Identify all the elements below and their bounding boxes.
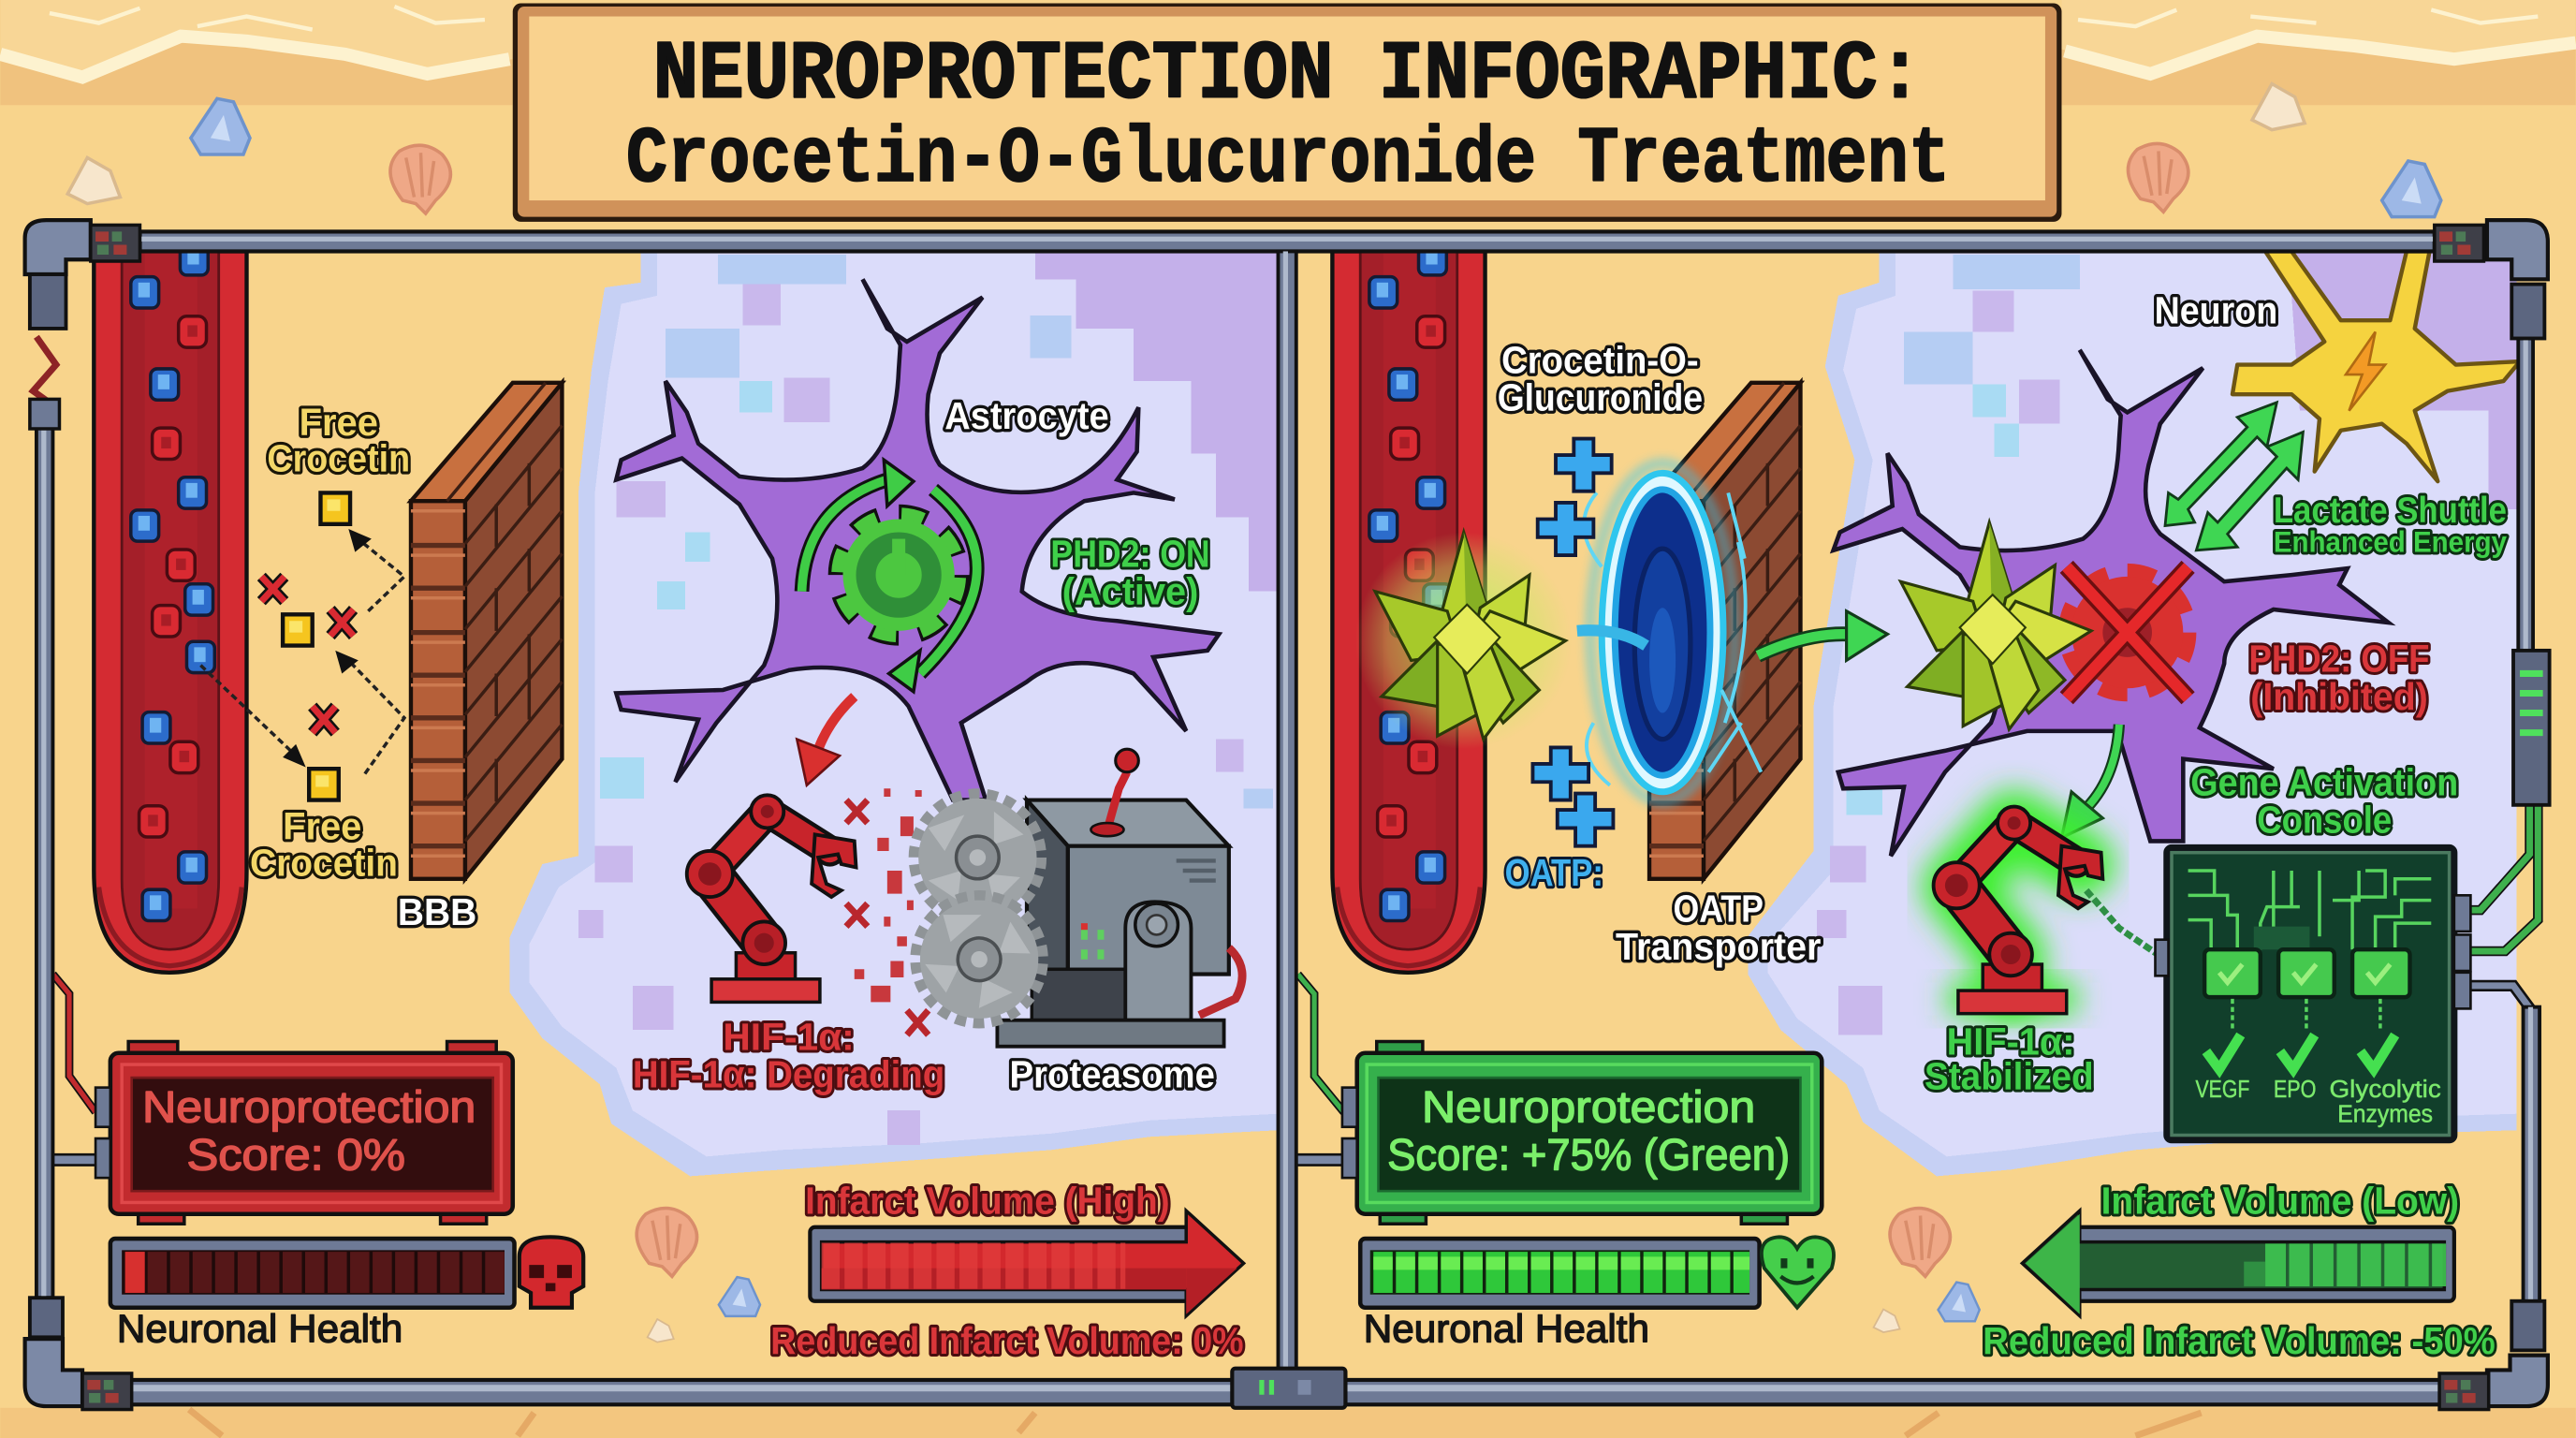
health bar: control: [110, 1239, 515, 1308]
wire: console to arm: [2086, 890, 2165, 960]
blood vessel: treated: [1332, 244, 1486, 973]
coupling: top right: [2435, 225, 2483, 261]
pipe: right vertical lower: [2524, 1007, 2539, 1302]
shell: orange scallop: [390, 145, 450, 213]
label: glycolytic enzymes: Glycolytic: [2329, 1075, 2441, 1103]
label: BBB: BBB: [398, 890, 476, 933]
saw blade top: [918, 799, 1037, 917]
crystal glow: [1355, 533, 1573, 749]
arrow: into astrocyte: [1758, 611, 1887, 660]
shell: cream pebble: [67, 157, 120, 204]
label: astrocyte: Astrocyte: [944, 394, 1109, 437]
label: glycolytic enzymes: [2329, 1075, 2441, 1127]
coupling: bottom left: [82, 1373, 132, 1410]
label: PHD2 on: [1050, 532, 1210, 613]
panel: control lavender cell field: [509, 251, 1278, 1176]
label: free crocetin top: Crocetin: [267, 437, 410, 480]
wire: control red: [50, 975, 110, 1178]
label: lactate shuttle: Enhanced Energy: [2274, 525, 2507, 559]
arrow: to HIF-1a: [2061, 725, 2119, 838]
inhibited PHD2 gear with X: [2067, 566, 2188, 698]
elbow: top left: [25, 220, 91, 329]
dashed bounce arrows: [200, 540, 404, 773]
shell: cream pebble control lower: [648, 1319, 674, 1343]
label: PHD2 off: PHD2: OFF: [2249, 638, 2430, 681]
shell: blue pebble right: [2382, 161, 2441, 217]
socket: left: [30, 399, 59, 429]
label: crocetin-O-glucuronide: [1498, 338, 1703, 419]
shell: scallop control lower: [637, 1209, 697, 1276]
check box VEGF: [2204, 949, 2261, 997]
label: reduced infarct 0: Reduced Infarct Volume: 0%: [770, 1319, 1244, 1362]
label: free crocetin bottom: Crocetin: [250, 841, 398, 884]
label: crocetin-O-glucuronide: Crocetin-O-: [1501, 338, 1699, 381]
HIF-1a robotic arm degrading: [687, 795, 856, 1002]
label: proteasome: Proteasome: [1010, 1053, 1215, 1096]
label: PHD2 off: [2249, 638, 2430, 718]
lactate shuttle double arrows: [2165, 403, 2303, 550]
blood vessel: control: [94, 244, 247, 973]
pipe: centre vertical: [1278, 251, 1296, 1382]
wire tangle: left: [33, 337, 56, 407]
label: gene activation console: Gene Activation: [2190, 760, 2458, 803]
label: HIF-1a stabilized: HIF-1α:: [1947, 1020, 2075, 1064]
label: HIF-1a stabilized: Stabilized: [1925, 1054, 2094, 1097]
stabilized HIF-1a robotic arm with glow: [1934, 807, 2102, 1015]
label: crocetin-O-glucuronide: Glucuronide: [1498, 376, 1703, 419]
active PHD2 gear with cycle arrows: [802, 460, 977, 692]
top shoreline right: [2061, 0, 2576, 105]
pipe: left vertical: [37, 424, 52, 1298]
label: infarct high: Infarct Volume (High): [805, 1180, 1170, 1223]
free crocetin blocked at BBB: [200, 401, 410, 884]
arrow: degradation: [797, 697, 855, 785]
label: OATP transporter: [1616, 887, 1822, 968]
pipe: right vertical upper: [2518, 338, 2533, 653]
shell: cream pebble treated lower: [1874, 1310, 1900, 1332]
label: neuron: Neuron: [2155, 289, 2277, 332]
pipe: bottom left: [128, 1380, 1234, 1404]
label: VEGF: VEGF: [2195, 1075, 2249, 1103]
icon: skull: [520, 1237, 583, 1308]
label: free crocetin bottom: Free: [283, 805, 361, 848]
elbow: bottom left: [25, 1298, 82, 1406]
top shoreline left: [0, 0, 513, 105]
panel: treated lavender cell field: [1748, 251, 2517, 1176]
infarct arrow: low: [2022, 1211, 2454, 1316]
label: lactate shuttle: [2274, 491, 2507, 559]
arrow: crossing portal: [1577, 630, 1647, 646]
title line 2: Crocetin-O-Glucuronide Treatment: [626, 116, 1950, 205]
wire: treated green: [1298, 975, 1357, 1178]
title line 1: NEUROPROTECTION INFOGRAPHIC:: [653, 30, 1923, 123]
label: EPO: EPO: [2274, 1075, 2316, 1103]
label: free crocetin top: Free: [300, 401, 378, 444]
label: neuronal health treated: Neuronal Health: [1364, 1307, 1649, 1351]
saw blade bottom: [903, 884, 1055, 1035]
label: OATP: OATP:: [1505, 851, 1603, 894]
gene activation console: [2167, 847, 2454, 1140]
label: gene activation console: Console: [2257, 799, 2392, 842]
astrocyte: control: [616, 279, 1219, 800]
check marks: [2206, 1034, 2395, 1069]
blue plus signs: [1532, 439, 1613, 846]
infarct arrow: high: [810, 1211, 1244, 1316]
label: free crocetin bottom: [250, 805, 398, 884]
neuron: [2232, 251, 2520, 481]
shell: blue pebble treated lower: [1939, 1283, 1980, 1321]
score panel: treated: Neuroprotection: [1422, 1082, 1755, 1132]
label: PHD2 on: PHD2: ON: [1050, 532, 1210, 575]
label: PHD2 off: (Inhibited): [2250, 675, 2428, 718]
astrocyte: treated: [1834, 350, 2389, 856]
score panel: treated: [1357, 1041, 1822, 1224]
treated portal transporter: [1584, 463, 1761, 801]
shell: scallop treated lower: [1890, 1209, 1950, 1276]
blood brain barrier wall: control: [411, 383, 562, 879]
label: HIF-1a degrading: HIF-1α: Degrading: [633, 1053, 944, 1096]
title plaque: [513, 4, 2061, 222]
shell: blue pebble: [191, 98, 250, 154]
label: OATP transporter: Transporter: [1616, 925, 1822, 968]
blood brain barrier wall: treated: [1649, 383, 1800, 879]
red block marks: [261, 577, 354, 733]
pipe: bottom right: [1345, 1380, 2456, 1404]
connector: right green: [2513, 651, 2550, 805]
label: lactate shuttle: Lactate Shuttle: [2274, 491, 2507, 531]
label: glycolytic enzymes: Enzymes: [2337, 1099, 2433, 1127]
score panel: control: Score: 0%: [186, 1130, 405, 1180]
shell: orange scallop right: [2128, 143, 2188, 212]
score panel: control: [110, 1041, 513, 1224]
label: reduced infarct 50: Reduced Infarct Volume: -50%: [1983, 1319, 2496, 1362]
label: OATP transporter: OATP: [1673, 887, 1764, 930]
pipe: top: [139, 231, 2435, 251]
icon: smiling heart: [1762, 1237, 1834, 1308]
coupling: bottom right: [2439, 1373, 2489, 1410]
label: PHD2 on: (Active): [1062, 570, 1198, 613]
elbow: top right: [2487, 220, 2548, 338]
connector: centre: [1232, 1369, 1345, 1408]
wires: console to frame: [2155, 723, 2538, 1010]
check box glycolytic: [2352, 949, 2409, 997]
coupling: top left: [91, 225, 139, 261]
label: gene activation console: [2190, 760, 2458, 842]
label: free crocetin top: [267, 401, 410, 480]
proteasome machine with saws: [903, 749, 1242, 1047]
shell: blue pebble control lower: [719, 1277, 760, 1316]
bottom sand strip: [0, 1408, 2576, 1438]
shell: cream pebble right: [2252, 83, 2305, 130]
label: infarct low: Infarct Volume (Low): [2101, 1180, 2459, 1223]
degraded fragments: [846, 788, 929, 1034]
crystal: inside astrocyte: [1901, 522, 2091, 729]
score panel: control: Neuroprotection: [142, 1082, 476, 1132]
label: neuronal health control: Neuronal Health: [117, 1307, 402, 1351]
elbow: bottom right: [2487, 1301, 2548, 1406]
crystal: crocetin-O-glucuronide in blood: [1375, 533, 1566, 740]
score panel: treated: Score: +75% (Green): [1387, 1130, 1790, 1180]
label: HIF-1a degrading: HIF-1α:: [723, 1015, 855, 1058]
check box EPO: [2278, 949, 2334, 997]
label: HIF-1a stabilized: [1925, 1020, 2094, 1097]
health bar: treated: [1360, 1239, 1760, 1308]
label: HIF-1a degrading: [633, 1015, 944, 1096]
